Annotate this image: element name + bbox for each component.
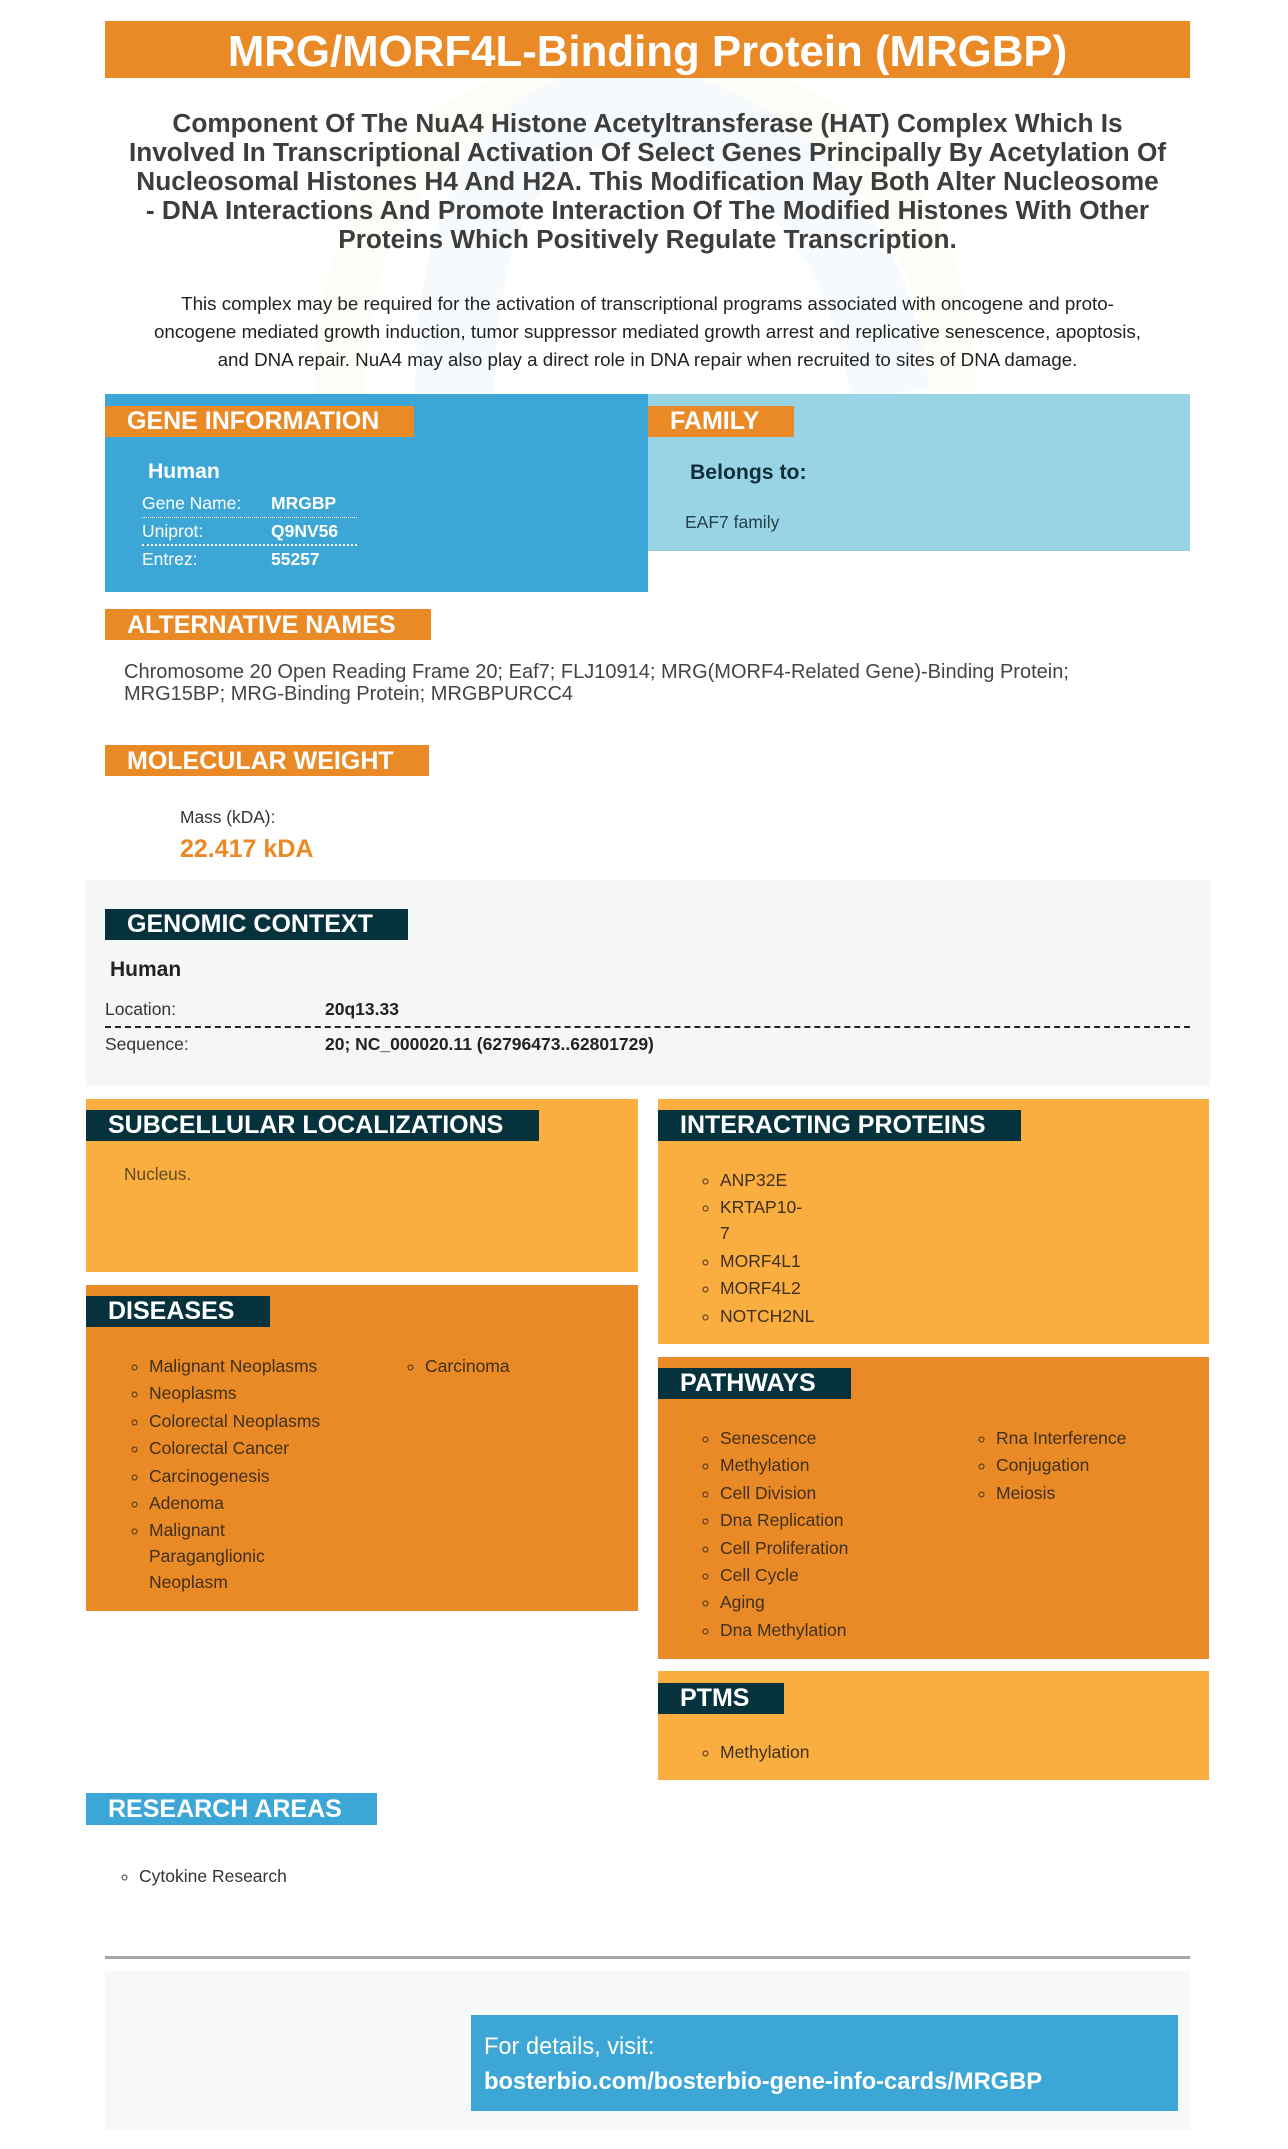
heading: family: FAMILY — [670, 407, 759, 435]
location row: Location: — [105, 999, 176, 1019]
heading: research areas: RESEARCH AREAS — [108, 1795, 342, 1823]
call to action box — [471, 2015, 1178, 2111]
subtitle: Involved In Transcriptional Activation Of Select Genes Principally By Acetylation Of — [129, 137, 1166, 167]
alternative names text — [124, 661, 1069, 705]
sequence row: 20; NC_000020.11 (62796473..62801729) — [325, 1034, 654, 1054]
research areas list: Cytokine Research — [139, 1866, 287, 1886]
heading: pathways — [658, 1368, 851, 1399]
pathways list: Methylation — [720, 1455, 810, 1475]
title: MRG/MORF4L-Binding Protein (MRGBP) — [228, 27, 1067, 76]
sequence row: Sequence: — [105, 1034, 189, 1054]
mass value: 22.417 kDA — [180, 835, 313, 863]
pathways list: Cell Proliferation — [720, 1538, 848, 1558]
pathways list: Aging — [720, 1592, 765, 1612]
panel: diseases — [86, 1285, 638, 1610]
gene info table: Q9NV56 — [271, 521, 338, 541]
heading: ptms: PTMS — [680, 1684, 749, 1712]
alternative names text: MRG15BP; MRG-Binding Protein; MRGBPURCC4 — [124, 683, 573, 705]
interacting proteins list: MORF4L2 — [720, 1278, 801, 1298]
panel: interacting proteins — [658, 1099, 1209, 1344]
interacting proteins list — [702, 1170, 814, 1326]
panel: genomic context — [86, 880, 1210, 1086]
family value: EAF7 family — [685, 512, 779, 532]
description paragraph: and DNA repair. NuA4 may also play a direct role in DNA repair when recruited to sites of DNA damage. — [218, 349, 1077, 370]
pathways list: Senescence — [720, 1428, 816, 1448]
panel: pathways — [658, 1357, 1209, 1659]
description paragraph: oncogene mediated growth induction, tumor suppressor mediated growth arrest and replicative senescence, apoptosis, — [154, 321, 1141, 342]
heading: alternative names: ALTERNATIVE NAMES — [127, 611, 396, 639]
pathways list: Cell Division — [720, 1483, 816, 1503]
diseases list: Colorectal Neoplasms — [149, 1411, 320, 1431]
pathways list: Dna Replication — [720, 1510, 844, 1530]
subtitle: Component Of The NuA4 Histone Acetyltransferase (HAT) Complex Which Is — [172, 108, 1123, 138]
pathways list column 2: Rna Interference — [996, 1428, 1126, 1448]
heading: genomic context: GENOMIC CONTEXT — [127, 910, 373, 938]
pathways list column 2: Conjugation — [996, 1455, 1089, 1475]
heading: subcellular localizations: SUBCELLULAR LOCALIZATIONS — [108, 1111, 503, 1139]
footer panel — [105, 1971, 1190, 2130]
description paragraph: This complex may be required for the activation of transcriptional programs associated with oncogene and proto- — [181, 293, 1114, 314]
panel: ptms — [658, 1671, 1209, 1780]
alternative names text: Chromosome 20 Open Reading Frame 20; Eaf7; FLJ10914; MRG(MORF4-Related Gene)-Binding Protein; — [124, 661, 1069, 683]
background watermark logo — [415, 78, 930, 394]
diseases list: Colorectal Cancer — [149, 1438, 289, 1458]
mass label: Mass (kDA): — [180, 807, 275, 827]
interacting proteins list: MORF4L1 — [720, 1251, 801, 1271]
diseases list: Adenoma — [149, 1493, 224, 1513]
subtitle: Proteins Which Positively Regulate Transcription. — [338, 224, 957, 254]
pathways list column 2 — [978, 1428, 1126, 1503]
diseases list: Malignant Neoplasms — [149, 1356, 317, 1376]
diseases list column 2: Carcinoma — [425, 1356, 510, 1376]
interacting proteins list: NOTCH2NL — [720, 1306, 814, 1326]
location row — [105, 999, 399, 1019]
heading: diseases — [86, 1296, 270, 1327]
diseases list: Malignant — [149, 1520, 225, 1540]
diseases list — [132, 1356, 320, 1592]
species label: Human — [110, 958, 181, 981]
heading: ptms — [658, 1683, 784, 1714]
heading: gene information: GENE INFORMATION — [127, 407, 379, 435]
gene info table — [142, 493, 357, 569]
panel: family — [648, 394, 1190, 551]
pathways list: Cell Cycle — [720, 1565, 799, 1585]
heading: family — [648, 406, 794, 437]
gene info table: 55257 — [271, 549, 320, 569]
pathways list column 2: Meiosis — [996, 1483, 1055, 1503]
sequence row — [105, 1034, 654, 1054]
gene info table: Gene Name: — [142, 493, 241, 513]
ptms list: Methylation — [720, 1742, 810, 1762]
interacting proteins list: KRTAP10- — [720, 1197, 802, 1217]
belongs to label: Belongs to: — [690, 461, 807, 484]
gene info table: Uniprot: — [142, 521, 203, 541]
heading: pathways: PATHWAYS — [680, 1369, 816, 1397]
diseases list: Paraganglionic — [149, 1546, 265, 1566]
heading: diseases: DISEASES — [108, 1297, 234, 1325]
diseases list: Neoplasms — [149, 1383, 237, 1403]
heading: interacting proteins: INTERACTING PROTEINS — [680, 1111, 986, 1139]
gene info table: Entrez: — [142, 549, 197, 569]
interacting proteins list: 7 — [720, 1223, 730, 1243]
url: bosterbio.com/bosterbio-gene-info-cards/MRGBP — [484, 2069, 1042, 2095]
subtitle — [129, 108, 1166, 254]
title — [105, 21, 1190, 78]
panel: subcellular localizations — [86, 1099, 638, 1272]
species label: Human — [148, 460, 220, 483]
description paragraph — [154, 293, 1141, 370]
diseases list: Carcinogenesis — [149, 1466, 270, 1486]
diseases list: Neoplasm — [149, 1572, 228, 1592]
subtitle: - DNA Interactions And Promote Interaction Of The Modified Histones With Other — [146, 195, 1149, 225]
pathways list: Dna Methylation — [720, 1620, 846, 1640]
localization text: Nucleus. — [124, 1164, 191, 1184]
visit label: For details, visit: — [484, 2034, 654, 2060]
interacting proteins list: ANP32E — [720, 1170, 787, 1190]
pathways list — [702, 1428, 848, 1640]
heading: molecular weight: MOLECULAR WEIGHT — [127, 747, 394, 775]
gene info table: MRGBP — [271, 493, 336, 513]
panel: gene information — [105, 394, 648, 592]
subtitle: Nucleosomal Histones H4 And H2A. This Modification May Both Alter Nucleosome — [136, 166, 1159, 196]
location row: 20q13.33 — [325, 999, 399, 1019]
